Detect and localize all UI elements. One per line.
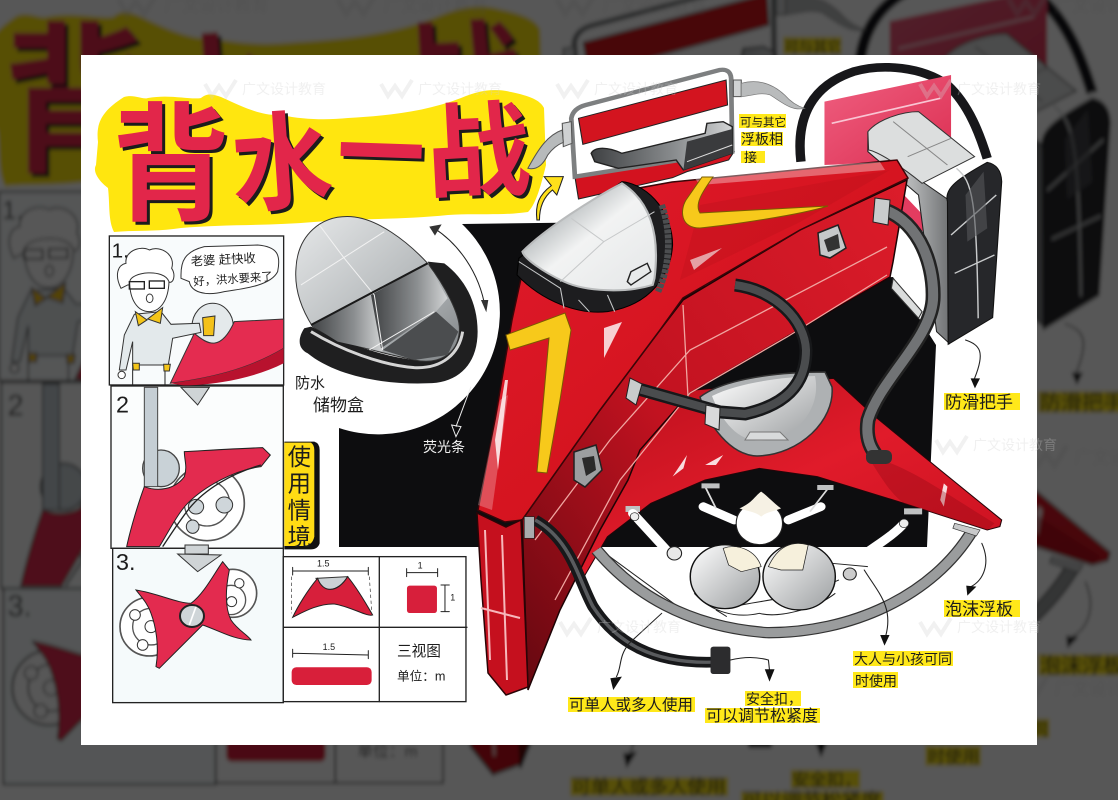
title <box>112 93 533 238</box>
vertical label: usage scenario: 使 <box>288 444 311 470</box>
views note: 单位：m <box>397 670 445 684</box>
panel 1: 老婆 赶快收 <box>190 251 256 269</box>
vertical label: usage scenario <box>284 442 320 550</box>
label: foam board: 泡沫浮板 <box>945 600 1013 619</box>
panel 1: 好，洪水要来了 <box>193 269 273 289</box>
flank seams <box>535 247 887 600</box>
label: connects with other boards: 可与其它 <box>740 115 786 129</box>
visor / front dome <box>517 182 673 312</box>
title highlight <box>95 90 546 232</box>
three views panel <box>283 557 467 702</box>
front view <box>292 559 373 617</box>
yellow trims <box>506 177 828 473</box>
lower star-shaped board <box>579 378 1002 580</box>
silver bowl <box>700 372 832 456</box>
people under the board <box>597 483 980 633</box>
watermarks: 广文设计教育 <box>597 619 681 635</box>
title: 背 <box>112 96 230 238</box>
foam arc <box>597 523 980 633</box>
watermarks: 广文设计教育 <box>957 619 1041 635</box>
label: connects with other boards <box>739 114 786 165</box>
watermarks: 广文设计教育 <box>957 81 1041 97</box>
main product: bottom strip <box>477 513 528 695</box>
panel 1 <box>109 236 284 386</box>
label: anti-slip handle: 防滑把手 <box>945 393 1013 412</box>
side view: 1 <box>450 593 455 603</box>
title: 一 <box>335 94 427 216</box>
watermarks: 广文设计教育 <box>242 81 326 97</box>
panel 2 and 3: 2 <box>116 391 129 417</box>
panel 1: 1. <box>112 240 129 263</box>
label: safety buckle: 可以调节松紧度 <box>706 707 818 725</box>
main product: front shell <box>478 160 908 522</box>
adult figures <box>598 513 909 617</box>
label: connects with other boards: 接 <box>744 150 757 165</box>
top view <box>292 642 372 685</box>
watermarks: 广文设计教育 <box>418 81 502 97</box>
watermarks <box>205 80 1057 635</box>
gloss highlights <box>690 162 885 185</box>
side view: 1 <box>418 560 423 570</box>
label: waterproof storage box: 储物盒 <box>313 396 364 415</box>
watermarks: 广文设计教育 <box>973 437 1057 453</box>
main product: side flank <box>522 180 907 690</box>
label: safety buckle <box>705 691 820 725</box>
label: single or multiple users: 可单人或多人使用 <box>569 696 693 714</box>
panel 2 and 3 <box>111 386 283 703</box>
adjustable black strap <box>524 517 730 674</box>
label: adult and child together <box>853 651 953 689</box>
vertical label: usage scenario: 境 <box>288 524 311 550</box>
label: safety buckle: 安全扣， <box>746 691 802 707</box>
handle straps and buckles <box>574 198 933 487</box>
watermarks: 广文设计教育 <box>594 81 678 97</box>
label: connects with other boards: 浮板相 <box>741 131 783 147</box>
storage box closeup <box>296 217 488 383</box>
vertical label: usage scenario: 情 <box>288 497 311 523</box>
top view: 1.5 <box>323 642 335 652</box>
label: fluorescent strip: 荧光条 <box>423 439 465 455</box>
poster sheet <box>81 55 1057 745</box>
floating block <box>868 112 1002 344</box>
label: waterproof storage box <box>295 375 364 415</box>
title: 水 <box>227 101 336 227</box>
label: adult and child together: 时使用 <box>855 673 897 689</box>
hatched arrow <box>178 545 221 572</box>
black backdrop behind product <box>339 222 936 547</box>
body behind: pink plate and hoop <box>800 67 987 318</box>
title: 战 <box>423 93 533 214</box>
rotation arrow <box>429 224 488 312</box>
child figure <box>626 483 922 545</box>
panel 2 and 3: 3. <box>116 549 135 575</box>
label: adult and child together: 大人与小孩可同 <box>854 651 952 667</box>
views note <box>397 643 445 684</box>
views note: 三视图 <box>397 643 441 660</box>
yellow connector arrow <box>536 177 563 220</box>
side view <box>407 560 455 613</box>
arrow: fluorescent strip <box>452 387 471 437</box>
detail: foam board connector <box>528 70 805 220</box>
callout arrows <box>610 340 986 690</box>
label: waterproof storage box: 防水 <box>295 375 325 392</box>
vertical label: usage scenario: 用 <box>288 471 311 497</box>
storybook panels: usage scenario <box>109 236 320 703</box>
front view: 1.5 <box>317 559 329 569</box>
